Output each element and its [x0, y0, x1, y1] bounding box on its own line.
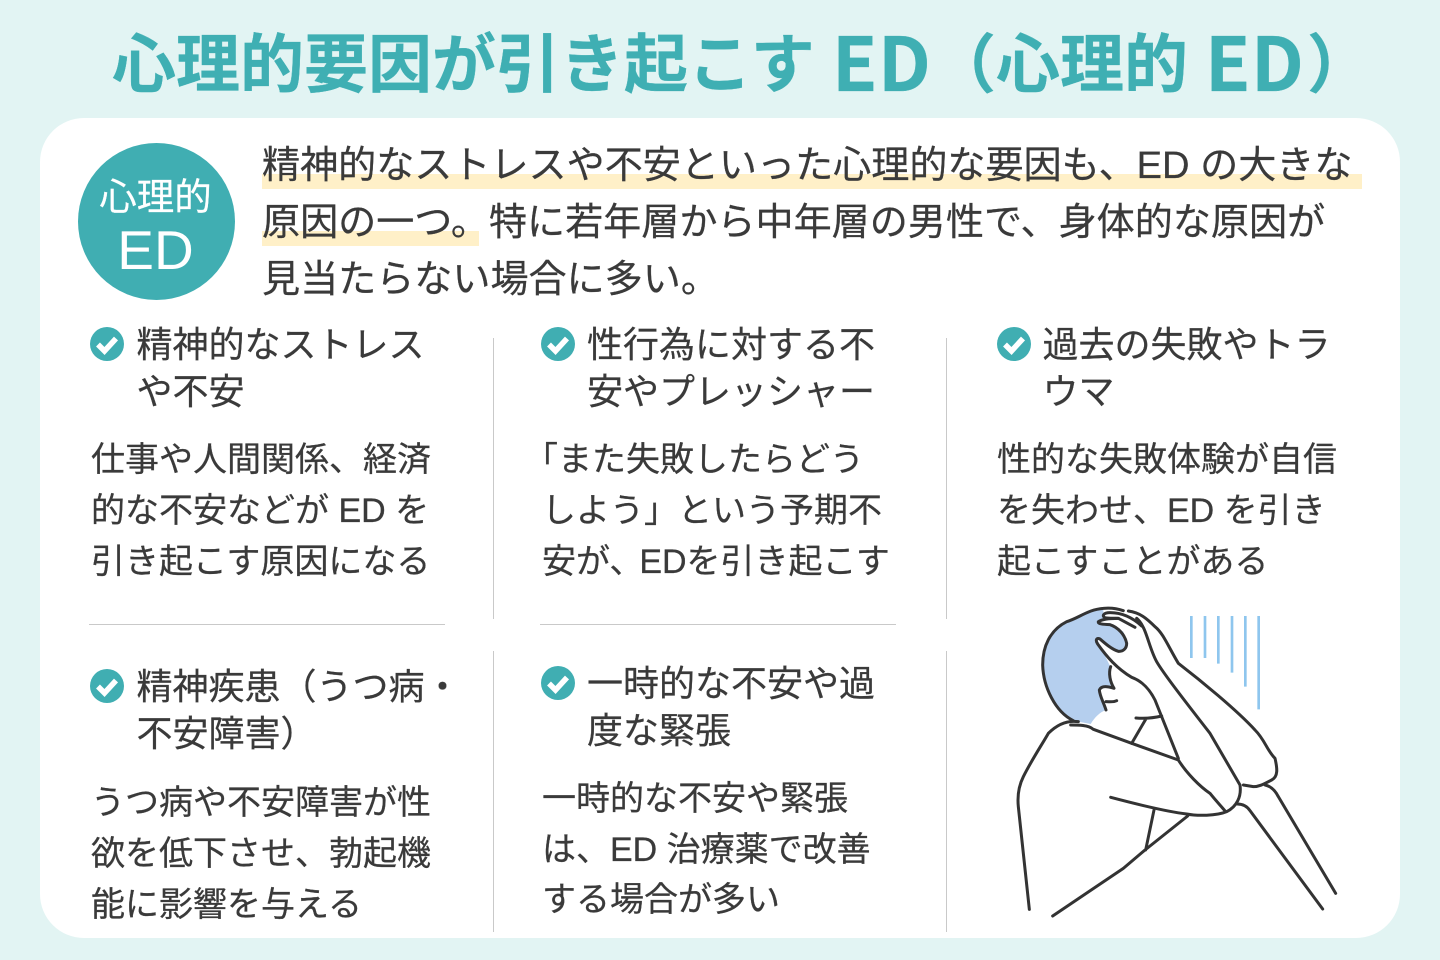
item: 一時的な不安や過度な緊張: する場合が多い — [542, 881, 780, 919]
title: ED — [832, 6, 931, 113]
item: 精神的なストレスや不安: 仕事や人間関係、経済 — [91, 441, 431, 479]
icon: check — [997, 327, 1031, 361]
item: 精神疾患: 欲を低下させ、勃起機 — [91, 835, 431, 873]
badge: 心理的 ED — [78, 143, 235, 300]
item: 性行為に対する不安やプレッシャー: 安やプレッシャー — [587, 371, 875, 412]
item: 精神的なストレスや不安: 精神的なストレス — [136, 324, 425, 365]
item: 精神疾患 — [90, 666, 461, 924]
title: 心理的要因が引き起こす — [112, 29, 815, 101]
title: ） — [1307, 29, 1371, 101]
item: 精神疾患: 不安障害） — [136, 713, 317, 754]
item: 過去の失敗やトラウマ — [997, 324, 1337, 581]
item: 精神疾患: 能に影響を与える — [91, 886, 362, 924]
intro text: 見当たらない場合に多い。 — [262, 259, 719, 301]
item: 性行為に対する不安やプレッシャー: 性行為に対する不 — [587, 324, 875, 365]
illustration: man holding his head — [1016, 606, 1338, 918]
item: 一時的な不安や過度な緊張: 一時的な不安や緊張 — [542, 780, 848, 818]
item: 過去の失敗やトラウマ: 過去の失敗やトラ — [1042, 324, 1331, 365]
intro text: 精神的なストレスや不安といった心理的な要因も、ED の大きな — [262, 145, 1352, 187]
item: 精神疾患: うつ病や不安障害が性 — [91, 784, 431, 822]
item: 一時的な不安や過度な緊張 — [541, 663, 875, 919]
item: 過去の失敗やトラウマ: 起こすことがある — [997, 543, 1268, 581]
icon: check — [541, 327, 575, 361]
item: 性行為に対する不安やプレッシャー: しよう」という予期不 — [542, 492, 882, 530]
item: 過去の失敗やトラウマ: を失わせ、ED を引き — [997, 492, 1326, 530]
item: 一時的な不安や過度な緊張: 度な緊張 — [587, 710, 731, 751]
hair — [1043, 608, 1127, 724]
item: 過去の失敗やトラウマ: ウマ — [1042, 371, 1115, 412]
intro text: 原因の一つ。特に若年層から中年層の男性で、身体的な原因が — [262, 202, 1325, 244]
item: 性行為に対する不安やプレッシャー: 安が、EDを引き起こす — [542, 543, 890, 581]
icon: check — [90, 669, 124, 703]
badge: 心理的 ED: 心理的 — [99, 176, 212, 218]
item: 過去の失敗やトラウマ: 性的な失敗体験が自信 — [997, 441, 1337, 479]
intro text — [262, 145, 1362, 301]
title: （心理的 — [932, 29, 1188, 101]
item: 一時的な不安や過度な緊張: は、ED 治療薬で改善 — [542, 831, 871, 869]
item: 性行為に対する不安やプレッシャー — [524, 324, 890, 581]
title — [112, 6, 1371, 113]
item: 精神疾患: 精神疾患（うつ病・ — [136, 666, 461, 707]
item: 精神的なストレスや不安 — [90, 324, 431, 581]
icon: check — [90, 327, 124, 361]
item: 性行為に対する不安やプレッシャー: 「また失敗したらどう — [524, 441, 864, 479]
item: 精神的なストレスや不安: 引き起こす原因になる — [91, 543, 430, 581]
icon: check — [541, 666, 575, 700]
item: 精神的なストレスや不安: や不安 — [136, 371, 245, 412]
item: 精神的なストレスや不安: 的な不安などが ED を — [91, 492, 429, 530]
item: 一時的な不安や過度な緊張: 一時的な不安や過 — [587, 663, 875, 704]
badge: 心理的 ED: ED — [117, 219, 194, 281]
title: ED — [1205, 6, 1304, 113]
